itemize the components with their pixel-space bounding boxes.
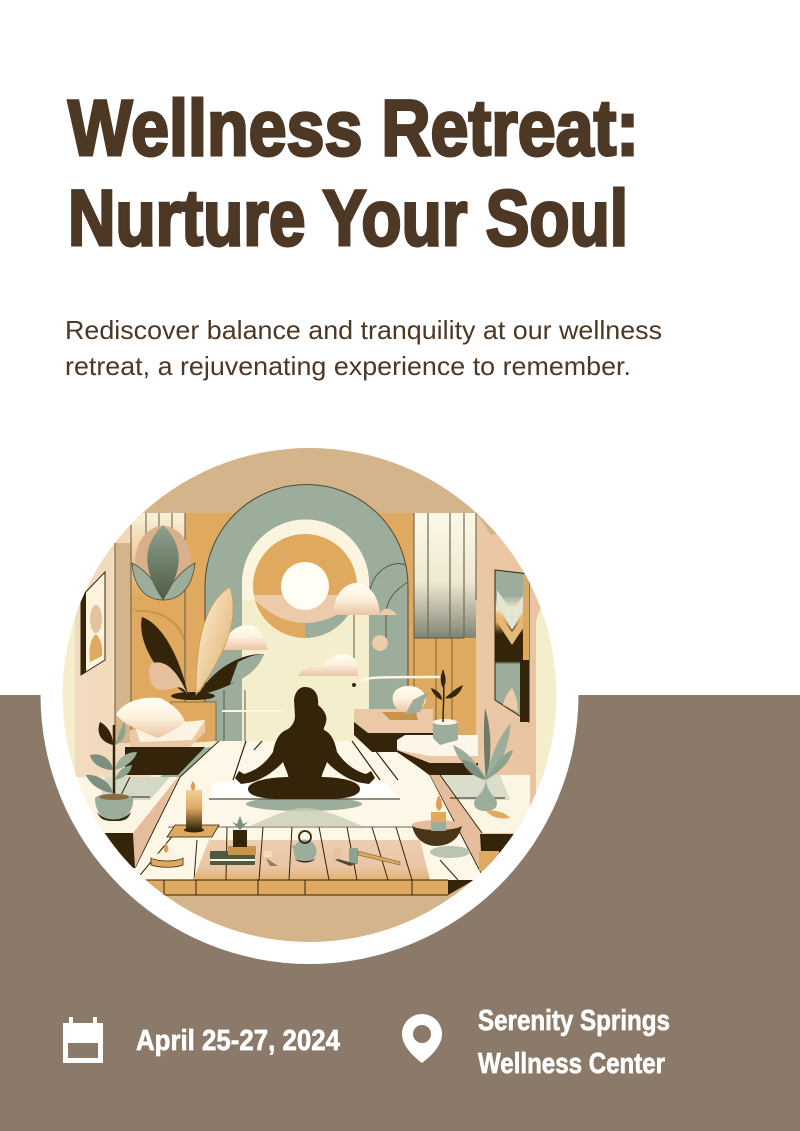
left bench with pillow: [116, 698, 205, 775]
tall candle on tray: [167, 781, 219, 837]
title: Wellness Retreat:: [68, 83, 639, 172]
icon: location pin: [402, 1014, 442, 1063]
incense items: [333, 848, 400, 866]
orange wall: [131, 513, 476, 748]
arch wires: [370, 564, 408, 640]
large potted plant: [135, 587, 264, 748]
icon: calendar: [63, 1017, 103, 1063]
title: Nurture Your Soul: [68, 173, 628, 262]
location text: Serenity Springs: [478, 1005, 670, 1037]
sill: [362, 677, 440, 682]
right curtain: [414, 513, 476, 740]
right wall hanging: [495, 570, 529, 722]
wall leaf ornament: [132, 525, 195, 600]
arch: [205, 484, 408, 745]
tan lower ground: [146, 880, 473, 942]
illustration: meditation room: [60, 445, 560, 950]
subtitle: Rediscover balance and tranquility at our wellness: [65, 315, 662, 345]
right benches: [354, 686, 478, 775]
left curtain: [115, 513, 185, 745]
subtitle: [65, 315, 662, 381]
white circle frame: [40, 426, 578, 964]
floor: [135, 741, 481, 880]
left plant: [86, 722, 137, 821]
floor front edge: [145, 880, 474, 895]
small cup: [264, 851, 278, 866]
yoga mat: [209, 782, 400, 799]
ceiling: [142, 448, 496, 535]
teapot: [291, 831, 316, 862]
small plant on bench: [431, 670, 463, 745]
title: [68, 83, 639, 262]
small candle left: [151, 843, 183, 867]
sun: [253, 534, 357, 638]
left framed picture: [81, 572, 105, 675]
seated figure shadow: [246, 797, 362, 826]
lower brown band: [0, 695, 800, 1131]
right plant with vase: [453, 708, 513, 819]
date text: April 25-27, 2024: [136, 1025, 340, 1057]
side walls: [60, 513, 560, 840]
bowl with candle: [412, 795, 470, 858]
clouds: [222, 583, 397, 676]
subtitle: retreat, a rejuvenating experience to remember.: [65, 351, 631, 381]
meditating figure silhouette: [235, 687, 375, 799]
books and small succulent: [210, 816, 256, 865]
cream base: [60, 445, 560, 945]
location text: Wellness Center: [478, 1048, 665, 1080]
lantern bag: [479, 851, 499, 871]
location text: [478, 1005, 670, 1080]
left step: [75, 777, 178, 868]
right step: [430, 775, 530, 873]
